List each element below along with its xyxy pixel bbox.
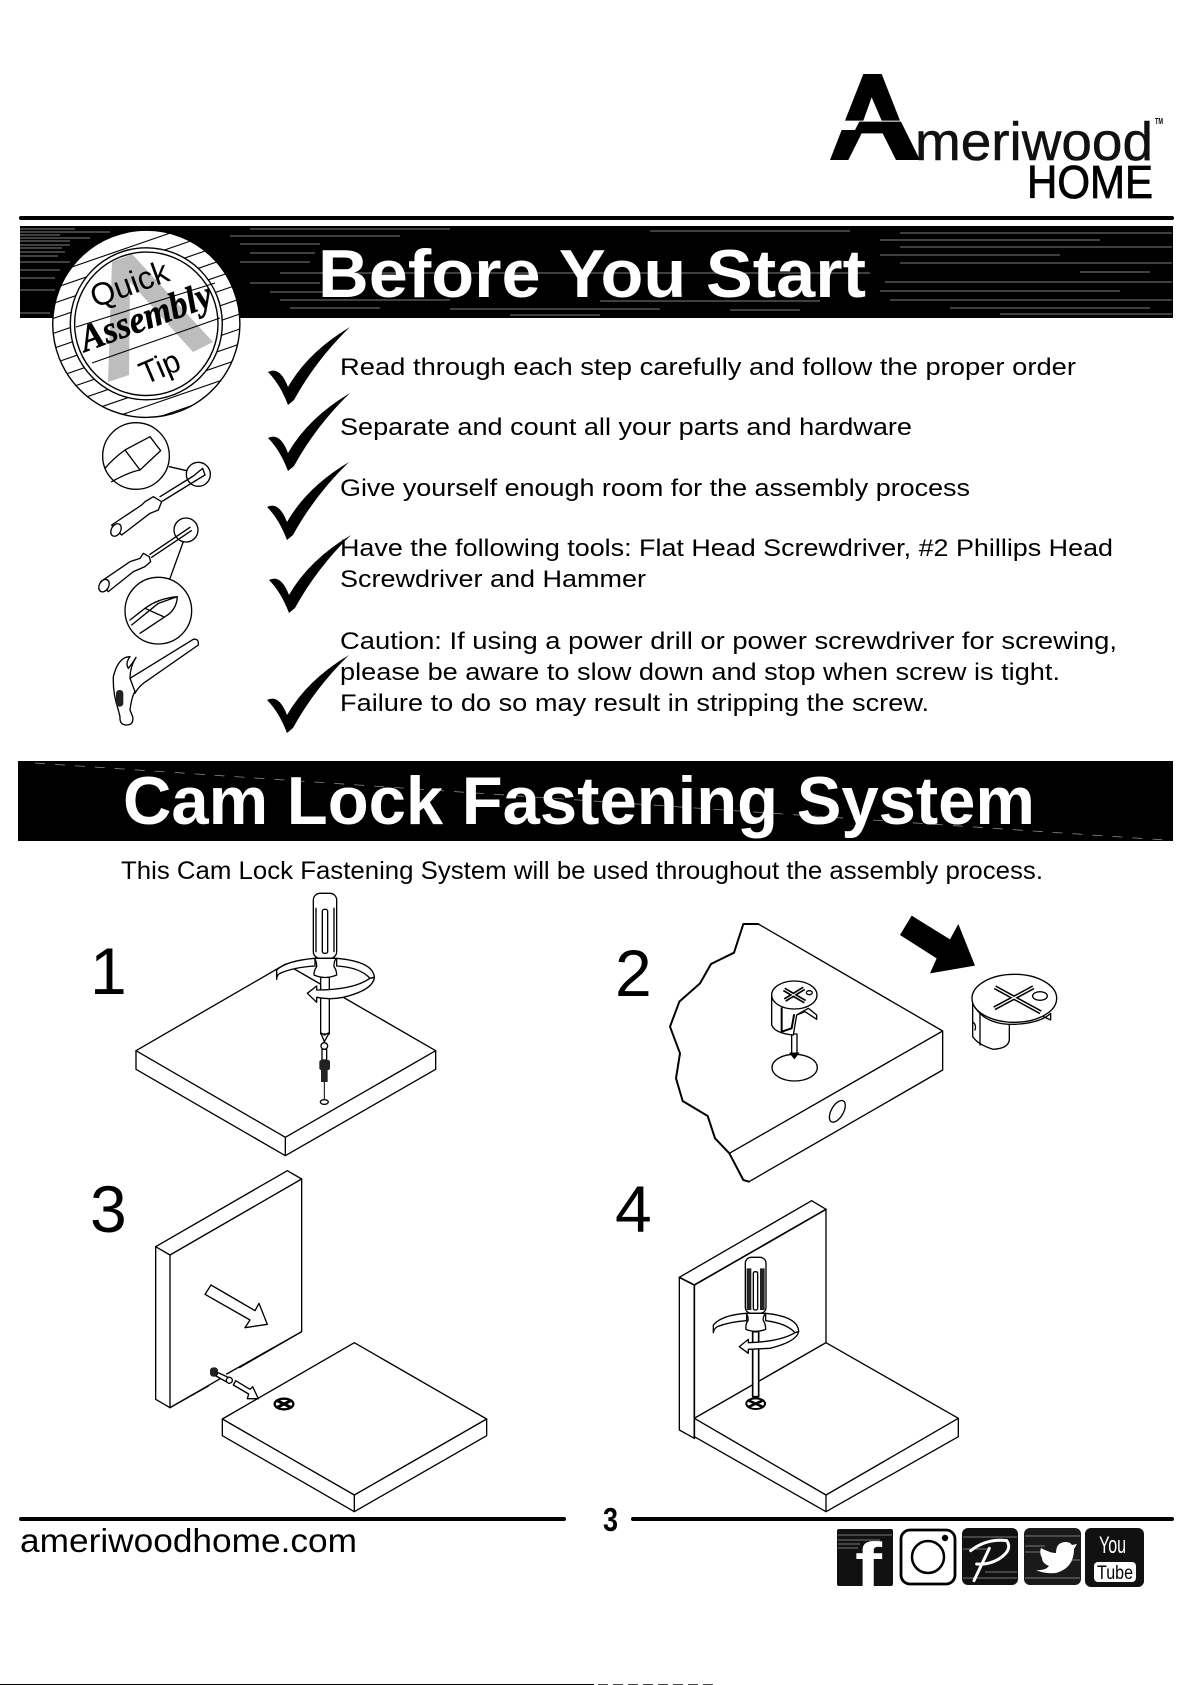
- step 3: [90, 1171, 487, 1512]
- logo: Ameriwood Home: [830, 74, 1163, 208]
- check item 5: caution: [267, 628, 1117, 733]
- footer rule left: [19, 1517, 566, 1521]
- check item 4: Screwdriver and Hammer: [340, 566, 646, 593]
- badge: Quick Assembly Tip: Assembly: [72, 274, 218, 361]
- icon: instagram: [901, 1530, 955, 1584]
- banner: Before You Start: Before You Start: [318, 236, 866, 312]
- check item 5: caution: Failure to do so may result in stripping the screw.: [340, 690, 929, 717]
- social icons: [837, 1528, 1144, 1600]
- step 2: [615, 916, 1057, 1182]
- subtitle: This Cam Lock Fastening System will be used throughout the assembly process.: [121, 857, 1043, 885]
- icon: hammer: [113, 639, 198, 725]
- diagram: joining panels: [156, 1171, 487, 1512]
- step number 3: 3: [90, 1172, 127, 1246]
- banner: Cam Lock Fastening System: Cam Lock Fastening System: [123, 763, 1035, 839]
- icon: twitter: [1024, 1528, 1081, 1585]
- page number: 3: [603, 1501, 618, 1538]
- badge: Quick Assembly Tip: Tip: [134, 342, 185, 391]
- diagram: screwdriver turning cam on board: [136, 893, 436, 1156]
- step number 1: 1: [90, 934, 127, 1008]
- icon: youtube: Tube: [1097, 1563, 1133, 1584]
- logo: Ameriwood Home: HOME: [1027, 156, 1153, 208]
- check item 2: [268, 393, 912, 471]
- banner: Before You Start: [20, 226, 1173, 318]
- detail: enlarged cam: [972, 974, 1057, 1049]
- badge: Quick Assembly Tip: Quick: [85, 253, 174, 315]
- icon: youtube: You: [1099, 1532, 1126, 1559]
- footer rule right: [631, 1517, 1174, 1521]
- icon: Phillips screwdriver: [97, 518, 198, 644]
- check item 4: Have the following tools: Flat Head Screwdriver, #2 Phillips Head: [340, 535, 1113, 562]
- icon: flat head screwdriver: [103, 423, 210, 538]
- check item 3: [267, 462, 970, 540]
- icon: facebook: [837, 1529, 893, 1600]
- icon: pinterest: [962, 1528, 1018, 1585]
- icon: youtube: [1085, 1528, 1144, 1587]
- step number 4: 4: [615, 1172, 652, 1246]
- check item 1: [268, 327, 1076, 405]
- icon: facebook: f: [855, 1531, 882, 1600]
- check item 5: caution: Caution: If using a power drill or power screwdriver for screwing,: [340, 628, 1117, 655]
- step 4: [615, 1172, 958, 1512]
- diagram: inserting cam into board: [670, 916, 1057, 1182]
- check item 4: [269, 535, 1113, 613]
- tool icons: screwdrivers and hammer: [97, 423, 210, 725]
- arrow: pointing to cam detail: [900, 916, 975, 973]
- diagram: tightening cam in assembled corner: [679, 1201, 958, 1512]
- check item 2: Separate and count all your parts and hardware: [340, 414, 912, 441]
- check item 1: Read through each step carefully and follow the proper order: [340, 354, 1076, 381]
- logo: Ameriwood Home: TM: [1155, 117, 1163, 126]
- logo: Ameriwood Home: meriwood: [915, 112, 1153, 172]
- website: ameriwoodhome.com: [20, 1522, 357, 1559]
- badge: Quick Assembly Tip: [52, 230, 241, 418]
- step number 2: 2: [615, 936, 652, 1010]
- step 1: [90, 893, 436, 1156]
- check item 5: caution: please be aware to slow down and stop when screw is tight.: [340, 659, 1060, 686]
- check item 3: Give yourself enough room for the assembly process: [340, 475, 970, 502]
- checklist: [267, 327, 1117, 733]
